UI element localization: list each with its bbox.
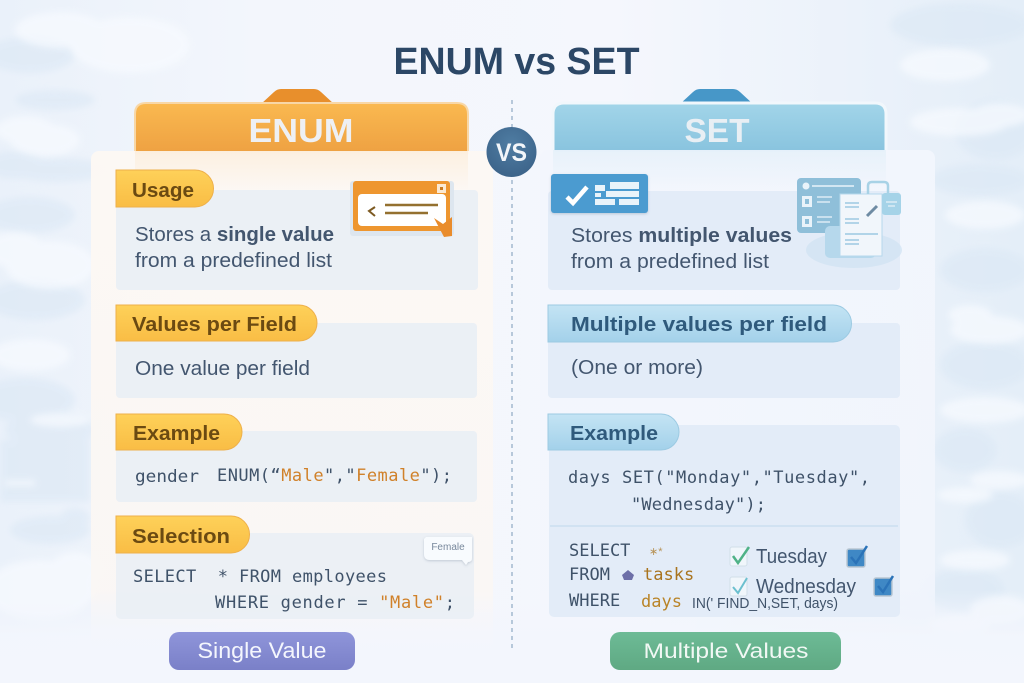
row: usage (116, 170, 478, 290)
icon: documents and forms (797, 178, 902, 268)
ENUM column (91, 89, 493, 670)
badge: Multiple Values (610, 632, 841, 670)
selection code: WHERE (569, 591, 620, 611)
example code: "Wednesday"); (631, 495, 766, 515)
icon: dropdown window (350, 181, 454, 237)
tag: Example: Example (570, 423, 658, 445)
row: values per field (116, 305, 477, 398)
selection code: ∗* (649, 546, 663, 558)
selection code: WHERE gender = "Male"; (215, 593, 455, 613)
SET column (540, 89, 935, 670)
example code: ENUM(“Male","Female"); (217, 466, 452, 486)
selection code: SELECT * FROM employees (133, 567, 387, 587)
usage text (135, 224, 334, 272)
callout: Female (424, 537, 472, 565)
callout: Female: Female (431, 542, 465, 553)
dashed divider (511, 100, 513, 650)
badge: Single Value: Single Value (198, 638, 326, 663)
tag: Multiple values per field (548, 305, 852, 342)
badge: Multiple Values: Multiple Values (644, 640, 808, 663)
one or more text: (One or more) (571, 357, 703, 379)
badge: Single Value (169, 632, 355, 670)
VS badge (486, 127, 536, 177)
tag: Selection: Selection (132, 526, 230, 548)
tag: Usage (116, 170, 214, 207)
title: ENUM vs SET (394, 41, 640, 83)
example code: days SET("Monday","Tuesday", (568, 468, 870, 488)
SET header: SET (684, 112, 750, 149)
tag: Example: Example (133, 423, 220, 445)
selection code: days (641, 592, 682, 612)
ENUM panel (91, 151, 493, 651)
tag: Multiple values per field: Multiple values per field (571, 314, 827, 336)
row: example and selection (548, 414, 900, 617)
checkbox: Wednesday: Wednesday (756, 576, 856, 598)
tag icon: checklist (551, 174, 648, 213)
SET panel (540, 150, 935, 650)
selection code: tasks (643, 565, 694, 585)
tag: Values per Field: Values per Field (132, 314, 297, 336)
stores text: from a predefined list (571, 251, 769, 273)
tag: Values per Field (116, 305, 317, 341)
ENUM header: ENUM (248, 112, 354, 149)
example code (568, 468, 870, 515)
usage text: from a predefined list (135, 250, 332, 272)
usage text: Stores a single value (135, 224, 334, 246)
stores text (571, 225, 792, 273)
row: example (116, 414, 477, 502)
row: multiple values (548, 305, 900, 398)
SET header (553, 89, 886, 153)
tag: Example (116, 414, 242, 450)
values text: One value per field (135, 358, 310, 380)
tag: Usage: Usage (132, 180, 194, 202)
checkbox: Tuesday (730, 546, 867, 568)
row: stores (548, 174, 902, 290)
selection code (569, 541, 838, 612)
checkbox: Tuesday: Tuesday (756, 546, 827, 568)
ENUM header (135, 89, 468, 153)
tag: Selection (116, 516, 250, 553)
selection code: SELECT (569, 541, 630, 561)
example code: gender (135, 467, 199, 487)
selection code: IN(' FIND_N,SET, days) (692, 595, 838, 612)
tag: Example (548, 414, 679, 450)
selection code (133, 567, 455, 613)
selection code: FROM (569, 565, 610, 585)
VS badge: VS (496, 139, 527, 167)
checkbox: Wednesday (730, 576, 893, 598)
row: selection (116, 516, 474, 619)
stores text: Stores multiple values (571, 225, 792, 247)
